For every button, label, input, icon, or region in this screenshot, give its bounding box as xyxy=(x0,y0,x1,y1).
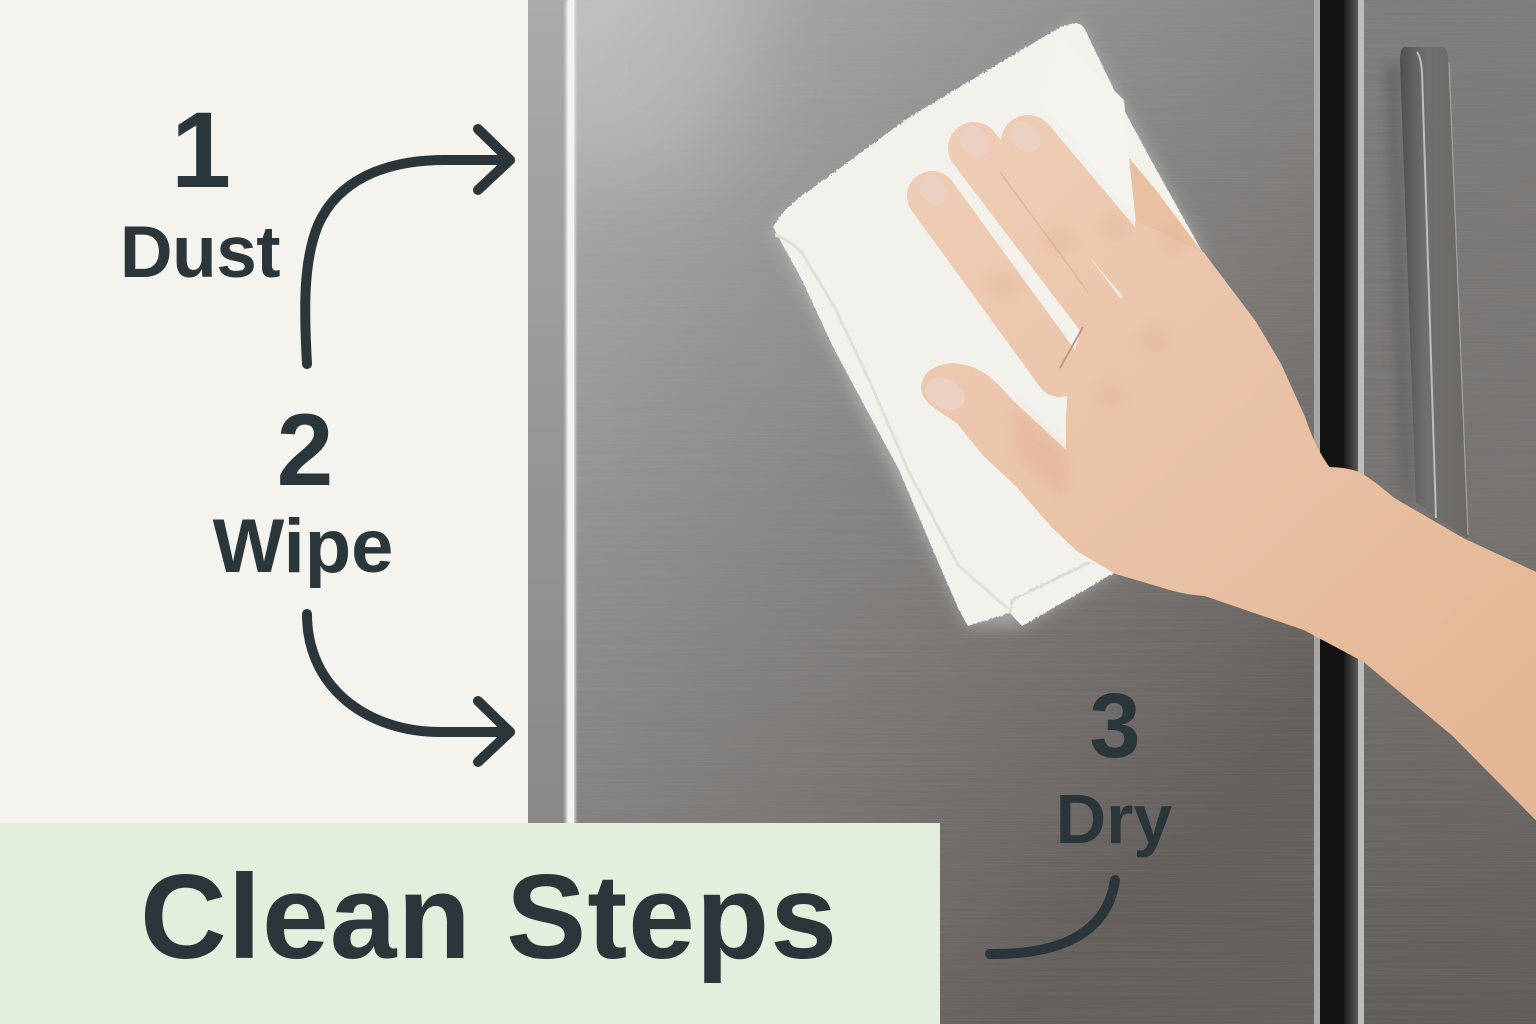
panel: stainless steel fridge xyxy=(528,0,1536,1024)
title: Clean Steps xyxy=(140,850,838,984)
middle finger xyxy=(974,148,1106,322)
arrow: Wipe to fridge xyxy=(307,614,510,762)
panel: green title banner xyxy=(0,823,940,1024)
thumb web shading xyxy=(1010,405,1067,500)
ring finger xyxy=(1028,142,1166,306)
icon: hand and forearm xyxy=(914,116,1536,819)
number 1: 1 xyxy=(171,89,231,210)
label: Dry: Dry xyxy=(1056,780,1172,858)
icon: hand wiping with white cloth xyxy=(773,23,1536,819)
cloth fold over pinky xyxy=(1040,40,1134,219)
arrow: Dry curve xyxy=(990,880,1115,954)
index finger xyxy=(932,196,1060,372)
fingernails xyxy=(1004,116,1046,158)
step 3 xyxy=(1056,675,1172,858)
number 3: 3 xyxy=(1089,675,1141,777)
icon: white microfiber cloth xyxy=(773,23,1203,626)
pinky finger xyxy=(1129,158,1230,330)
cloth glow xyxy=(773,23,1203,626)
icon: fridge handle xyxy=(1386,47,1468,539)
number 2: 2 xyxy=(277,393,333,507)
label: Wipe: Wipe xyxy=(213,504,393,589)
finger separations xyxy=(1000,172,1088,292)
panel: cream background xyxy=(0,0,530,1024)
step 1 xyxy=(120,89,280,293)
arrow: Dust to fridge xyxy=(305,129,510,364)
label: Dust: Dust xyxy=(120,212,280,293)
step 2 xyxy=(213,393,393,589)
knuckle shading xyxy=(987,214,1188,409)
